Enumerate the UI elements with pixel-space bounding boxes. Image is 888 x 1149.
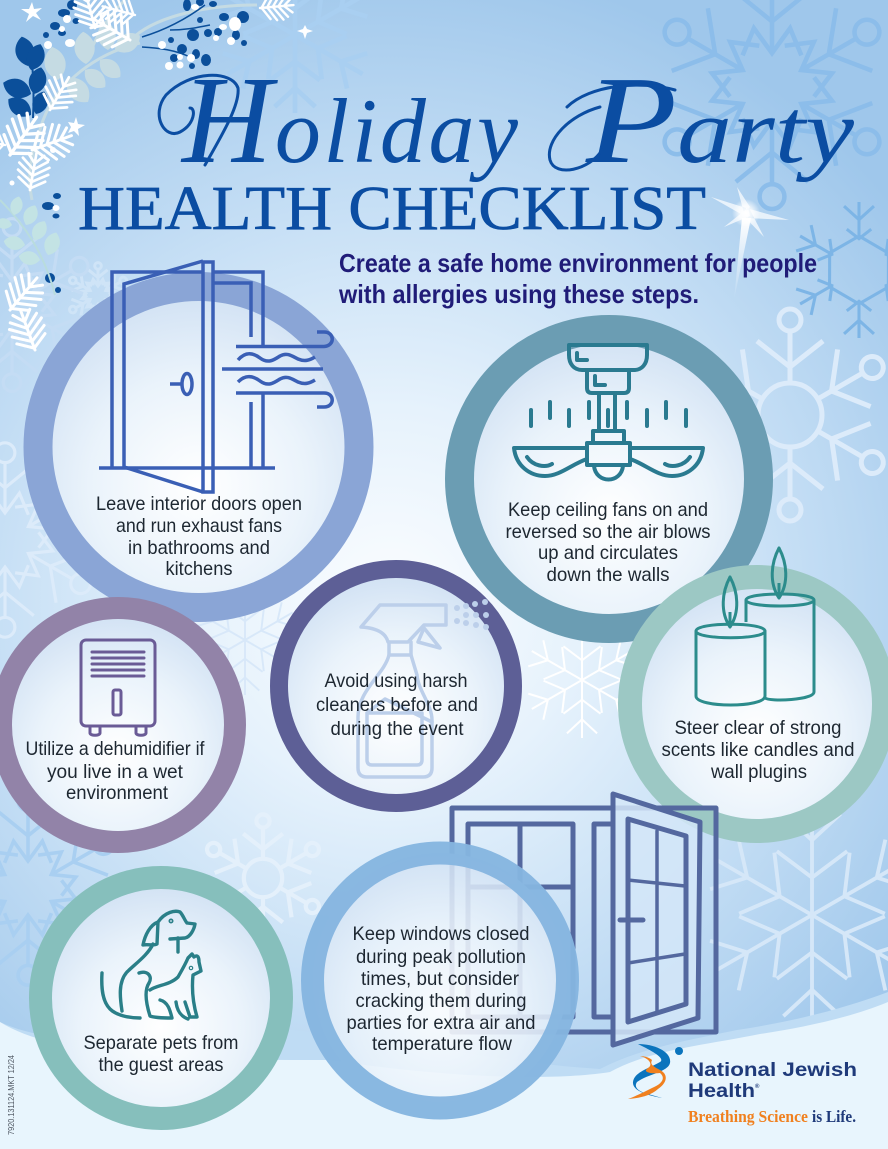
ring bbox=[312, 853, 568, 1108]
ring bbox=[460, 330, 758, 628]
wordmark: Health bbox=[688, 1081, 755, 1102]
text: Keep ceiling fans on and bbox=[508, 499, 708, 521]
text bbox=[346, 923, 536, 1055]
snow ground bbox=[0, 992, 888, 1149]
text: scents like candles and bbox=[662, 739, 854, 761]
text: parties for extra air and bbox=[346, 1012, 536, 1034]
text: kitchens bbox=[166, 558, 233, 580]
panel: pets bbox=[40, 878, 282, 1118]
panel: harsh cleaners bbox=[279, 569, 513, 803]
text: during peak pollution bbox=[356, 946, 526, 968]
intro text bbox=[338, 248, 817, 309]
ring bbox=[630, 577, 884, 831]
text bbox=[316, 670, 478, 740]
text: wall plugins bbox=[710, 761, 807, 783]
text bbox=[96, 493, 302, 580]
text: environment bbox=[66, 782, 169, 804]
ring bbox=[40, 878, 282, 1118]
panel: windows bbox=[312, 853, 568, 1108]
icon: door and exhaust bbox=[99, 261, 332, 492]
icon: candles bbox=[696, 548, 814, 705]
print code: 7920.131124.MKT 12/24 bbox=[7, 1054, 16, 1135]
text: Avoid using harsh bbox=[324, 670, 468, 692]
panel: candles bbox=[630, 548, 884, 831]
heading: Health Checklist: HEALTH CHECKLIST bbox=[78, 175, 706, 243]
text: temperature flow bbox=[372, 1033, 513, 1055]
text: times, but consider bbox=[361, 968, 519, 990]
title swashes bbox=[159, 75, 675, 170]
mint leaves low bbox=[0, 195, 63, 295]
icon: spray bottle bbox=[358, 599, 489, 777]
tagline: is Life. bbox=[812, 1107, 856, 1126]
text bbox=[506, 499, 711, 586]
wordmark: National Jewish bbox=[688, 1060, 857, 1081]
text: in bathrooms and bbox=[128, 537, 270, 559]
title script: Holiday Party: Party bbox=[585, 52, 854, 190]
stars bbox=[21, 2, 313, 136]
text: Leave interior doors open bbox=[96, 493, 302, 515]
text bbox=[26, 738, 205, 804]
text: Keep windows closed bbox=[352, 923, 530, 945]
text bbox=[84, 1032, 238, 1076]
logo: National Jewish Health bbox=[628, 1044, 857, 1126]
text: cracking them during bbox=[356, 990, 526, 1012]
text: Separate pets from bbox=[84, 1032, 238, 1054]
dark blue leaf branch bbox=[0, 35, 51, 122]
text bbox=[662, 717, 854, 783]
intro text: Create a safe home environment for people bbox=[339, 248, 817, 278]
wordmark bbox=[688, 1060, 857, 1102]
icon: helix bbox=[628, 1044, 683, 1099]
text: during the event bbox=[330, 718, 464, 740]
text: Steer clear of strong bbox=[674, 717, 842, 739]
ring bbox=[38, 286, 359, 608]
text: up and circulates bbox=[538, 542, 678, 564]
window icon bbox=[452, 794, 716, 1045]
text: and run exhaust fans bbox=[116, 515, 282, 537]
icon: ceiling fan bbox=[514, 345, 703, 480]
ring bbox=[1, 608, 235, 842]
foliage wreath bbox=[0, 0, 295, 356]
icon: dog and cat bbox=[102, 911, 201, 1019]
tagline: Breathing Science bbox=[688, 1107, 808, 1126]
berry clusters bbox=[42, 0, 249, 293]
wordmark: ® bbox=[755, 1083, 760, 1090]
title script: Holiday Party bbox=[159, 52, 854, 190]
text: you live in a wet bbox=[47, 761, 184, 783]
ring bbox=[279, 569, 513, 803]
white ferns bbox=[85, 4, 138, 55]
text: cleaners before and bbox=[316, 694, 478, 716]
title script: Holiday Party: Holiday bbox=[180, 52, 518, 190]
icon: dehumidifier bbox=[81, 640, 155, 735]
text: down the walls bbox=[546, 564, 670, 586]
intro text: with allergies using these steps. bbox=[338, 279, 699, 309]
text: the guest areas bbox=[98, 1054, 224, 1076]
pale mint leaves bbox=[30, 0, 257, 200]
panel: ceiling fans bbox=[460, 330, 758, 628]
text: reversed so the air blows bbox=[506, 521, 711, 543]
sparkle star bbox=[711, 187, 789, 300]
text: Utilize a dehumidifier if bbox=[26, 738, 205, 760]
panel: dehumidifier bbox=[1, 608, 235, 842]
panel: leave doors open bbox=[38, 261, 359, 608]
